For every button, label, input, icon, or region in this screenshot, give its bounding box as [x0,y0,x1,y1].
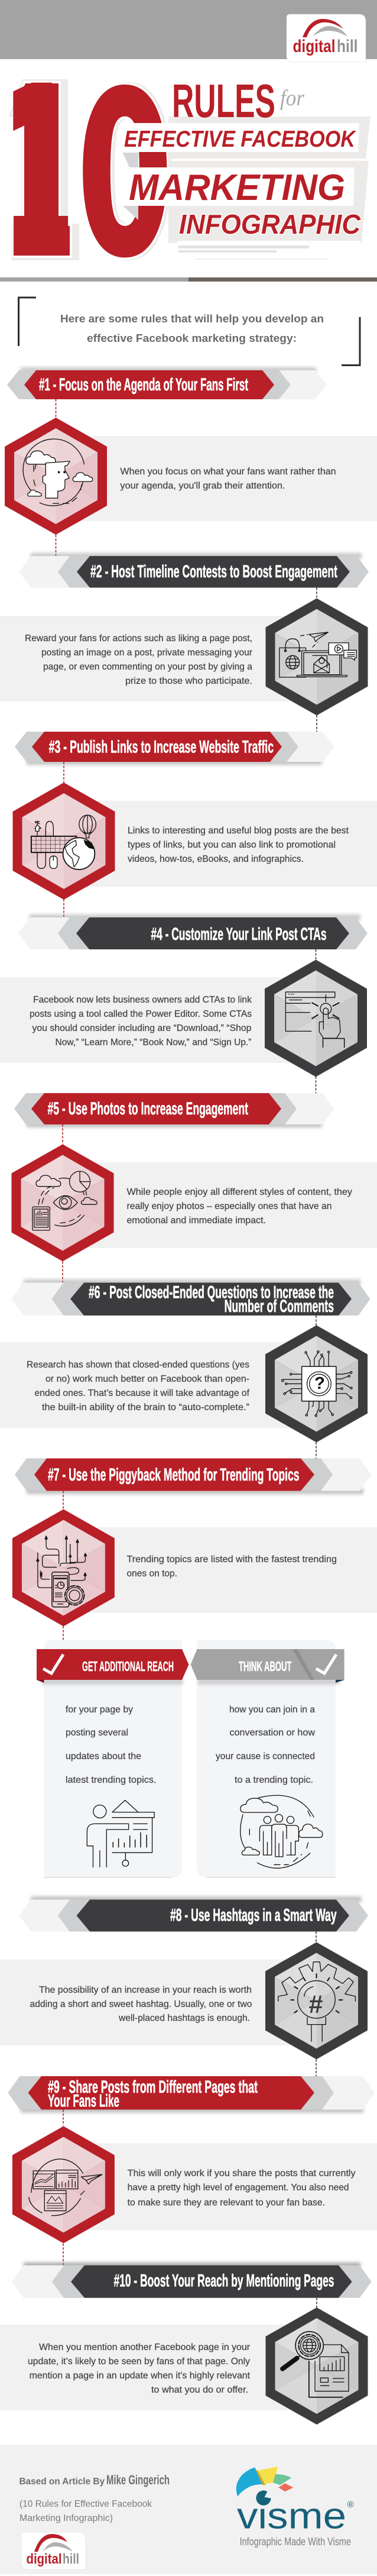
logo: digital hill footer [21,2532,86,2569]
panel: rule 3 text [59,801,377,887]
icon: dashboards and paper plane [29,2159,102,2216]
top header band [0,0,377,59]
title: 10 Rules for Effective Facebook Marketing Infographic: MARKETING [129,167,345,208]
logo: digital hill footer: hill [63,2551,79,2567]
logo: visme: Infographic Made With Visme [240,2536,351,2548]
rule 9 banner [8,2076,375,2113]
comparison card: think about: conversation or how [229,1728,315,1738]
panel: rule 9 text: This will only work if you share the posts that currently [128,2168,356,2179]
logo: visme [236,2467,354,2548]
panel: rule 4 text: you should consider including are “Download,” “Shop [32,1023,252,1033]
footer credits [19,2472,170,2523]
panel: rule 4 text: Now,” “Learn More,” “Book Now,” and “Sign Up.” [56,1037,252,1048]
title: 10 Rules for Effective Facebook Marketing Infographic: INFOGRAPHIC [179,209,361,240]
panel: rule 1 text: When you focus on what your fans want rather than [121,467,336,477]
comparison card: get additional reach: updates about the [66,1751,141,1761]
comparison card: get additional reach: GET ADDITIONAL REACH [82,1659,174,1674]
hexagon: rule 1 [5,418,107,535]
connector 3 [63,762,64,917]
icon: check mark [316,1654,336,1673]
icon: check mark [43,1654,63,1673]
icon: presenter with bar chart [87,1800,154,1867]
panel: rule 6 text: or no) work much better on Facebook than open- [46,1374,249,1384]
panel: rule 6 text: ended ones. That’s because it will take advantage of [34,1388,250,1398]
icon: gear bulb with hash [278,1962,355,2041]
panel: rule 2 text: page, or even commenting on your post by giving a [43,662,252,672]
icon: circuit chip with question mark [281,1351,352,1417]
footer credits: Based on Article By [19,2477,105,2487]
comparison card: get additional reach: posting several [66,1728,128,1738]
connector 4 [316,949,317,1093]
comparison card: think about: your cause is connected [216,1751,315,1761]
title: 10 Rules for Effective Facebook Marketing Infographic: for [280,86,304,111]
intro text with brackets: Here are some rules that will help you develop an [60,313,324,325]
footer credits: Marketing Infographic) [20,2513,113,2523]
panel: rule 10 text [0,2325,319,2410]
panel: rule 10 text: When you mention another Facebook page in your [39,2342,251,2352]
panel: rule 5 text: really enjoy photos – especially ones that have an [126,1201,332,1211]
panel: rule 8 text [0,1960,319,2045]
icon: magnifier over report [282,2332,349,2397]
logo: digital hill header: hill [337,37,358,56]
connector 6 [316,1316,317,1459]
hexagon: rule 8 [265,1942,368,2060]
hexagon: rule 5 [12,1144,113,1261]
logo: digital hill header [287,14,366,62]
panel: rule 5 text: While people enjoy all different styles of content, they [126,1187,352,1197]
question mark: ? [314,1374,325,1393]
comparison card: get additional reach: latest trending topics. [66,1775,156,1785]
rule 5 banner [14,1093,334,1127]
rule 10 banner [12,2263,372,2298]
panel: footer [0,2445,377,2574]
panel: rule 7 text: Trending topics are listed with the fastest trending [126,1554,337,1565]
hexagon: rule 2 [266,599,368,716]
title: 10 Rules for Effective Facebook Marketing Infographic: RULES [172,75,275,127]
rule 8 banner [19,1896,368,1932]
panel: rule 5 text: emotional and immediate impact. [126,1216,266,1226]
intro text with brackets: effective Facebook marketing strategy: [87,332,297,344]
big numeral 0: 0 [77,45,173,306]
hexagon: rule 3 [13,783,115,900]
rule 3 banner [15,732,334,765]
icon: shopping bag, laptop, email [280,632,356,677]
connector 10 [316,2298,317,2307]
icon: keyboard, globe and balloon [31,815,96,870]
logo: digital hill footer: digital [26,2551,61,2567]
panel: rule 1 text: your agenda, you'll grab their attention. [121,481,285,491]
hexagon: rule 10 [266,2307,368,2425]
logo: visme: ® [347,2500,354,2510]
panel: rule 6 text [0,1343,319,1428]
panel: rule 8 text: adding a short and sweet hashtag. Usually, one or two [30,1999,252,2009]
rule 2 banner [19,553,369,588]
icon: phone, gear and arrows [37,1536,86,1607]
big numeral 0: 0 [80,45,175,306]
panel: rule 4 text: Facebook now lets business owners add CTAs to link [33,995,252,1005]
panel: rule 9 text: to make sure they are relevant to your fan base. [128,2198,325,2207]
rule 9 banner: Your Fans Like [48,2092,119,2110]
rule 4 banner [18,914,368,949]
comparison card: think about [191,1640,344,1877]
panel: rule 4 text: posts using a tool called the Power Editor. Some CTAs [30,1009,252,1019]
big numeral 1: 1 [5,43,73,303]
comparison card: think about: to a trending topic. [235,1775,313,1785]
comparison card: think about: THINK ABOUT [239,1659,292,1674]
panel: rule 5 text [59,1162,377,1248]
panel: rule 1 text [53,436,377,521]
connector 9 [63,2109,64,2265]
panel: rule 9 text: have a pretty high level of engagement. You also need [128,2183,349,2193]
panel: rule 2 text: Reward your fans for actions such as liking a page post, [25,634,252,644]
connector 1 [56,399,57,556]
panel: rule 2 text [0,616,319,702]
panel: rule 2 text: prize to those who participate. [125,676,252,686]
logo: visme: visme [237,2496,346,2536]
footer credits: (10 Rules for Effective Facebook [20,2499,152,2509]
rule 1 banner [7,367,327,399]
footer credits: Mike Gingerich [106,2472,170,2487]
hexagon: rule 7 [12,1510,115,1627]
panel: rule 6 text: Research has shown that closed-ended questions (yes [27,1360,249,1370]
hexagon: rule 4 [265,959,367,1077]
hexagon: rule 6 [265,1325,368,1442]
comparison card: get additional reach: for your page by [66,1705,133,1715]
comparison card: get additional reach [37,1640,188,1877]
logo: digital hill header: digital [293,37,336,56]
panel: rule 10 text: update, it’s likely to be seen by fans of that page. Only [28,2357,250,2367]
panel: rule 7 text [59,1527,377,1613]
connector 8 [316,1932,317,2076]
panel: rule 10 text: mention a page in an update when it's highly relevant [30,2371,251,2381]
panel: rule 2 text: posting an image on a post, private messaging your [41,648,253,658]
hash symbol: # [309,1990,323,2019]
panel: rule 6 text: the built-in ability of the brain to “auto-complete.” [42,1402,249,1413]
connector 7 [63,1491,64,1640]
icon: head with clouds [23,439,93,506]
panel: rule 10 text: to what you do or offer. [151,2385,248,2395]
panel: rule 8 text: The possibility of an increase in your reach is worth [39,1985,252,1995]
hexagon: rule 9 [12,2126,115,2243]
connector 2 [316,588,317,732]
panel: rule 3 text: Links to interesting and useful blog posts are the best [128,826,349,836]
big numeral 0: 0 [77,45,173,306]
rule 7 banner [15,1459,371,1494]
divider bar [0,277,377,282]
icon: hand clicking a window [285,992,344,1048]
intro text with brackets [19,298,360,366]
comparison card: think about: how you can join in a [229,1705,315,1715]
panel: rule 7 text: ones on top. [126,1569,177,1579]
connector 5 [62,1124,63,1282]
title: 10 Rules for Effective Facebook Marketing Infographic [5,43,370,306]
panel: rule 3 text: types of links, but you can also link to promotional [128,840,336,850]
rule 6 banner [12,1279,370,1316]
panel: rule 8 text: well-placed hashtags is enough. [118,2013,250,2023]
panel: rule 3 text: videos, how-tos, eBooks, and infographics. [128,854,304,864]
panel: rule 9 text [59,2144,377,2230]
panel: rule 4 text [0,977,319,1063]
icon: team with clouds [240,1795,323,1868]
icon: eye, pie chart and tablet [32,1171,97,1230]
